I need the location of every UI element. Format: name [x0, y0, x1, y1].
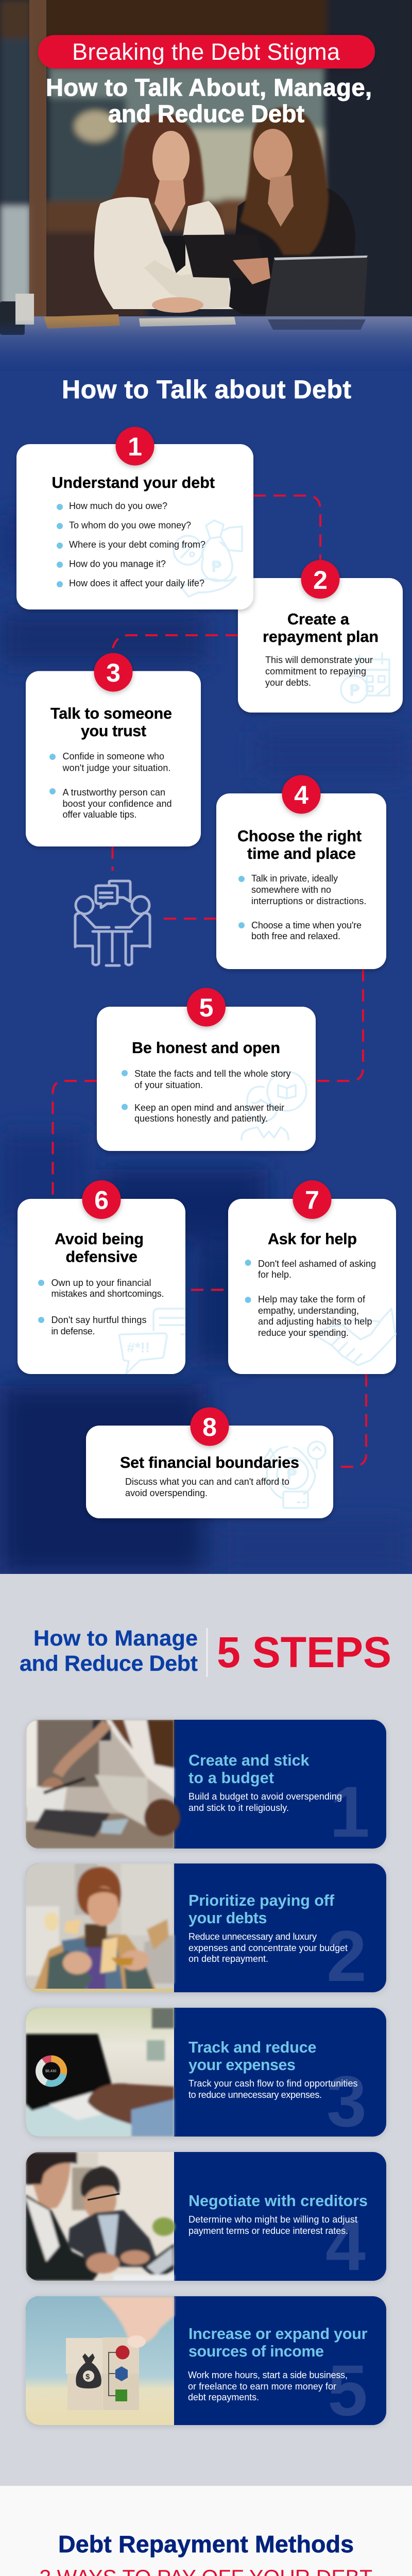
panel: step card 5 increase or expand your sources of income	[26, 2296, 386, 2431]
heading	[263, 611, 379, 646]
heading: you trust	[81, 722, 146, 740]
panel: debt repayment methods background with faded portrait	[0, 2486, 412, 2576]
table	[0, 316, 412, 366]
heading: Negotiate with creditors	[188, 2192, 368, 2210]
badge 8	[191, 1408, 229, 1446]
bullet list: for help.	[258, 1269, 291, 1280]
heading: defensive	[66, 1248, 138, 1265]
icon: angry speech bubbles	[119, 1309, 191, 1374]
big number: 1	[330, 1771, 370, 1852]
heading: repayment plan	[263, 628, 379, 646]
icon: money wheel with card and bulb	[265, 1442, 325, 1508]
heading: how to manage and reduce debt: and Reduce Debt	[20, 1651, 198, 1676]
bullet list: Talk in private, ideally	[251, 873, 338, 884]
badge 4: 4	[294, 781, 308, 809]
panel: step 5 be honest and open	[97, 1007, 316, 1151]
bullet list: Don't feel ashamed of asking	[258, 1259, 376, 1269]
text block	[188, 1791, 342, 1813]
bullet list: empathy, understanding,	[258, 1306, 359, 1316]
text block: expenses and concentrate your budget	[188, 1943, 348, 1953]
icon: calendar and peso coin	[341, 653, 389, 703]
text block	[265, 655, 373, 688]
heading: Ask for help	[268, 1230, 357, 1248]
panel: step 2 create a repayment plan	[238, 578, 403, 713]
main title: How to Talk About, Manage,	[46, 74, 372, 101]
heading	[50, 705, 172, 740]
main title: and Reduce Debt	[108, 100, 304, 127]
main title	[46, 74, 372, 127]
text block	[188, 2078, 357, 2100]
dashed connector 3 to chat icon	[111, 846, 113, 871]
heading: Prioritize paying off	[188, 1892, 335, 1909]
panel: step card 1 create and stick to a budget	[26, 1720, 386, 1852]
icon: person with book speech bubble	[242, 1072, 306, 1140]
heading: how to manage and reduce debt: How to Manage	[33, 1626, 198, 1651]
big number: 4	[325, 2205, 366, 2285]
dashed connector 1 to 2	[253, 496, 320, 563]
bullet list: of your situation.	[134, 1080, 203, 1090]
icon: money bag with percent: ₱	[211, 558, 222, 576]
bullet list: How does it affect your daily life?	[69, 578, 204, 588]
badge 2: 2	[313, 566, 328, 595]
bullet list: interruptions or distractions.	[251, 896, 367, 906]
photo: hand placing wooden blocks	[26, 2296, 174, 2425]
badge 1	[115, 427, 154, 466]
heading: how to manage and reduce debt	[20, 1626, 198, 1676]
photo: two businessmen talking	[26, 2152, 175, 2281]
badge 7: 7	[305, 1186, 319, 1215]
photo: hand placing wooden blocks: $	[85, 2372, 90, 2381]
bullet list: offer valuable tips.	[63, 809, 137, 820]
heading	[188, 1752, 310, 1787]
text block	[188, 2214, 357, 2236]
badge 2	[301, 560, 340, 599]
badge 8: 8	[202, 1413, 217, 1442]
dashed connector chat icon to 4	[162, 918, 216, 920]
bullet list: Own up to your financial	[52, 1278, 151, 1288]
badge 1: 1	[128, 432, 142, 461]
badge 6: 6	[94, 1186, 109, 1215]
text block	[188, 2370, 348, 2402]
text block: payment terms or reduce interest rates.	[188, 2226, 348, 2236]
text block: avoid overspending.	[125, 1488, 208, 1498]
heading: How to Talk about Debt: How to Talk about Debt	[62, 375, 351, 404]
heading: Set financial boundaries	[120, 1454, 299, 1471]
woman right	[229, 107, 355, 314]
bullet list	[238, 873, 367, 941]
heading: Avoid being	[55, 1230, 144, 1248]
bullet list: Where is your debt coming from?	[69, 539, 205, 550]
heading: 5 steps: 5 STEPS	[217, 1628, 391, 1676]
title pill: Breaking the Debt Stigma: Breaking the Debt Stigma	[72, 39, 340, 65]
icon: calendar and peso coin: ₱	[349, 682, 360, 700]
text block: Determine who might be willing to adjust	[188, 2214, 357, 2225]
bullet list: mistakes and shortcomings.	[52, 1289, 164, 1299]
heading: Understand your debt	[52, 474, 215, 492]
icon: money bag with percent	[174, 520, 242, 597]
heading	[188, 1892, 335, 1927]
heading	[55, 1230, 144, 1265]
photo: two women reviewing a clipboard	[0, 0, 412, 373]
bullet list: Confide in someone who	[63, 751, 164, 761]
heading: time and place	[247, 845, 356, 862]
bullet list: How much do you owe?	[69, 501, 167, 511]
big number: 3	[327, 2061, 367, 2142]
bullet list: Choose a time when you're	[251, 920, 362, 930]
text block: Build a budget to avoid overspending	[188, 1791, 342, 1802]
heading: your debts	[188, 1909, 267, 1927]
text block: and stick to it religiously.	[188, 1803, 289, 1813]
text block: debt repayments.	[188, 2392, 259, 2402]
panel: step card 3 track and reduce your expenses	[26, 2008, 386, 2142]
icon: angry speech bubbles: #*!!	[127, 1340, 150, 1355]
heading: Track and reduce	[188, 2039, 316, 2056]
heading: Increase or expand your	[188, 2325, 368, 2343]
icon: money wheel with card and bulb: ₱	[286, 1466, 297, 1484]
text block	[125, 1477, 289, 1498]
panel: step 8 set financial boundaries	[86, 1426, 333, 1518]
bullet list: in defense.	[52, 1326, 95, 1336]
badge 5: 5	[199, 993, 213, 1022]
bullet list: won't judge your situation.	[62, 762, 171, 773]
bullet list: Help may take the form of	[258, 1294, 366, 1304]
bullet list: reduce your spending.	[258, 1328, 349, 1338]
heading: Create and stick	[188, 1752, 310, 1769]
heading	[237, 827, 362, 862]
icon: handshake	[314, 1309, 396, 1365]
bullet list: Don't say hurtful things	[52, 1315, 146, 1325]
photo: woman cutting a credit card	[26, 1863, 174, 1992]
bullet list: both free and relaxed.	[251, 931, 340, 941]
dashed connector 5 to 6	[53, 1081, 97, 1195]
bullet list: How do you manage it?	[69, 558, 166, 569]
bullet list	[57, 501, 205, 588]
bullet list: questions honestly and patiently.	[134, 1113, 268, 1124]
badge 6	[82, 1180, 121, 1219]
heading: debt repayment methods: Debt Repayment Methods	[58, 2531, 354, 2557]
dashed connector 2 to 3	[113, 635, 238, 648]
laptop	[265, 256, 368, 316]
heading: to a budget	[188, 1769, 274, 1787]
badge 3	[94, 653, 133, 691]
heading: your expenses	[188, 2056, 296, 2074]
heading: Talk to someone	[50, 705, 172, 722]
photo: woman with calculator and receipt	[26, 1720, 180, 1849]
panel: step 7 ask for help	[228, 1199, 396, 1374]
panel: step card 4 negotiate with creditors	[26, 2152, 386, 2285]
heading: Create a	[287, 611, 350, 628]
dashed connector 4 to 5	[316, 969, 363, 1081]
badge 4	[282, 775, 320, 814]
dashed connector 7 to 8	[333, 1374, 366, 1467]
woman left	[94, 113, 234, 313]
panel: step 6 avoid being defensive	[18, 1199, 191, 1374]
bullet list	[38, 1278, 164, 1336]
heading: Choose the right	[237, 827, 362, 845]
text block: commitment to repaying	[265, 666, 366, 676]
bullet list: A trustworthy person can	[63, 787, 165, 798]
badge 5	[187, 988, 226, 1026]
heading	[188, 2325, 368, 2360]
big number: 5	[328, 2350, 368, 2431]
bullet list	[245, 1259, 376, 1338]
panel: step card 2 prioritize paying off your debts	[26, 1863, 386, 1996]
text block: your debts.	[265, 677, 311, 688]
panel: step 4 choose the right time and place	[216, 793, 386, 969]
bullet list: somewhere with no	[251, 885, 331, 895]
text block: Work more hours, start a side business,	[188, 2370, 348, 2380]
text block: or freelance to earn more money for	[188, 2381, 336, 2392]
text block: to reduce unnecessary expenses.	[188, 2090, 322, 2100]
text block	[188, 1931, 348, 1964]
photo: laptop with expense chart	[26, 2008, 174, 2137]
text block: on debt repayment.	[188, 1954, 268, 1964]
clipboard	[183, 234, 235, 278]
bullet list: To whom do you owe money?	[69, 520, 191, 531]
icon: two people talking at a table	[75, 881, 150, 965]
panel: step 1 understand your debt	[16, 444, 253, 609]
bullet list: boost your confidence and	[63, 799, 172, 809]
panel: blue talk section background	[0, 330, 412, 1574]
dashed connector 6 to 7	[191, 1289, 225, 1291]
heading	[188, 2039, 316, 2074]
big number: 2	[327, 1916, 367, 1996]
bullet list: State the facts and tell the whole story	[134, 1069, 290, 1079]
bullet list: Keep an open mind and answer their	[134, 1103, 284, 1113]
photo: laptop with expense chart: $8,430	[45, 2070, 57, 2073]
heading: Be honest and open	[132, 1039, 280, 1057]
text block: This will demonstrate your	[265, 655, 373, 665]
text block: Reduce unnecessary and luxury	[188, 1931, 317, 1942]
bullet list	[49, 751, 172, 820]
bullet list	[122, 1069, 290, 1124]
panel: gray steps section background	[0, 1574, 412, 2486]
text block: Discuss what you can and can't afford to	[125, 1477, 289, 1487]
badge 3: 3	[106, 658, 121, 687]
badge 7	[293, 1180, 332, 1219]
text block: Track your cash flow to find opportunities	[188, 2078, 357, 2089]
bullet list: and adjusting habits to help	[258, 1316, 372, 1327]
title pill: Breaking the Debt Stigma	[38, 35, 375, 69]
panel: step 3 talk to someone you trust	[26, 671, 201, 846]
heading: sources of income	[188, 2343, 324, 2360]
